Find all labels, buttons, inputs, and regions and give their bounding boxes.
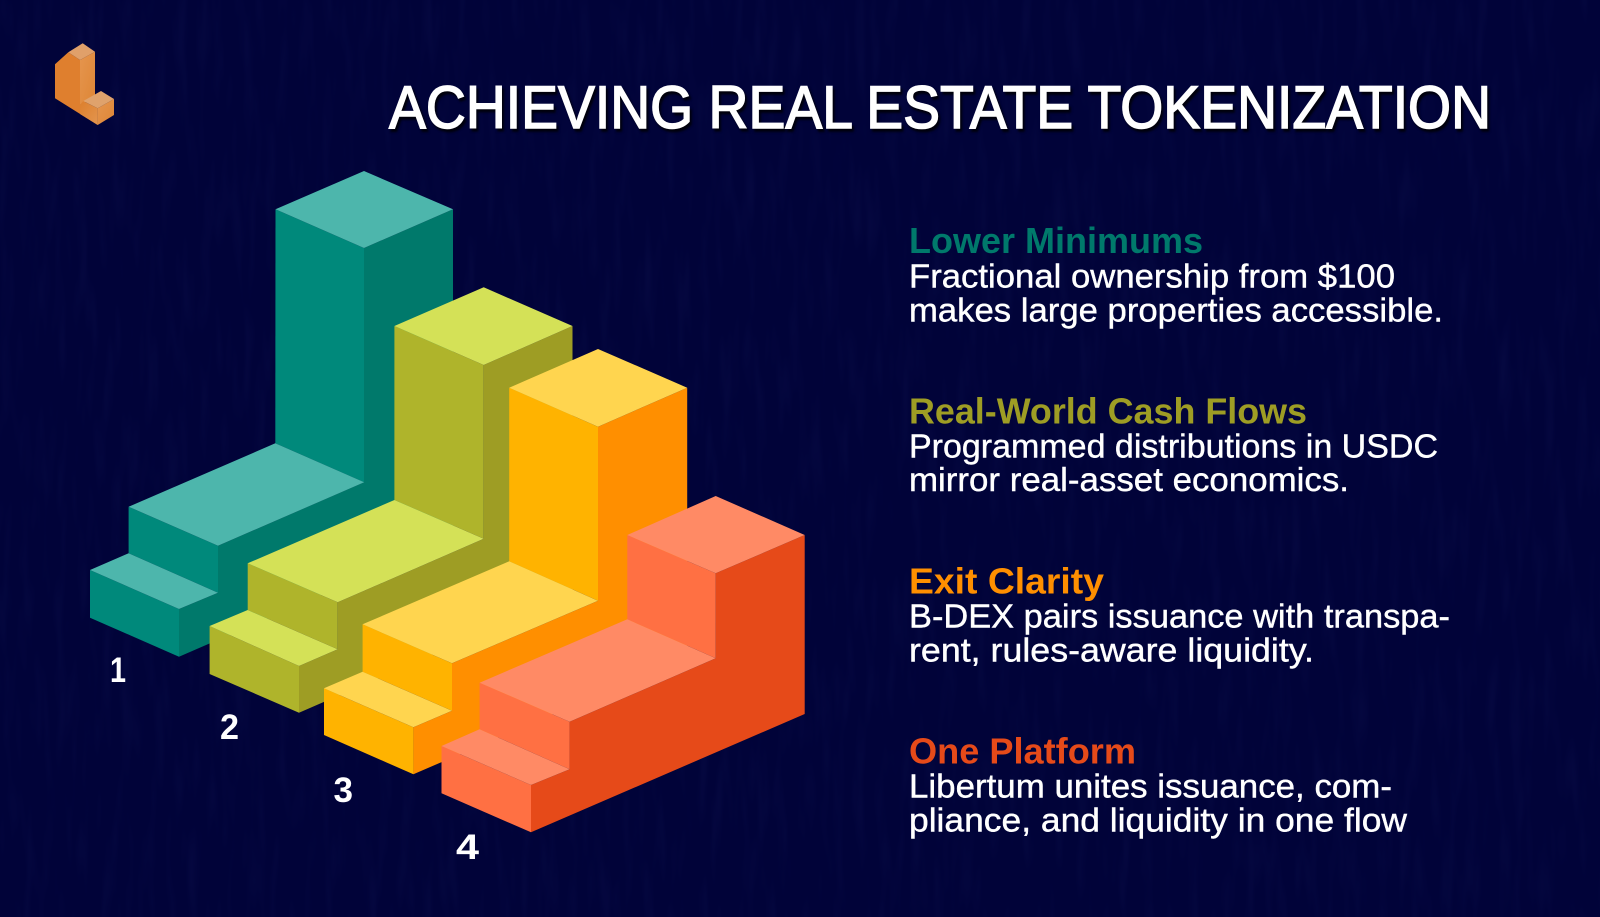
number 2: 2 (220, 708, 239, 747)
body: One Platform: Libertum unites issuance, com- (909, 768, 1392, 805)
number 4: 4 (456, 828, 480, 867)
heading: Real-World Cash Flows: Real-World Cash Flows (909, 391, 1307, 432)
body: Real-World Cash Flows: mirror real-asset economics. (909, 461, 1349, 498)
bar 3: amber (324, 349, 687, 774)
text block: One Platform (909, 731, 1407, 839)
bar 4: orange (442, 496, 805, 832)
heading: One Platform: One Platform (909, 731, 1136, 772)
body: Lower Minimums: makes large properties accessible. (909, 291, 1443, 328)
number 3: 3 (334, 771, 353, 810)
number 1: 1 (110, 651, 126, 690)
icon: Libertum logo (55, 43, 114, 125)
text block: Real-World Cash Flows (909, 391, 1438, 498)
text block: Lower Minimums (909, 220, 1443, 328)
body: Real-World Cash Flows: Programmed distributions in USDC (909, 427, 1438, 464)
heading: Exit Clarity: Exit Clarity (909, 560, 1104, 601)
heading: Lower Minimums: Lower Minimums (909, 220, 1203, 261)
text block: Exit Clarity (909, 560, 1450, 669)
body: Exit Clarity: B-DEX pairs issuance with transpa- (909, 598, 1450, 635)
body: Exit Clarity: rent, rules-aware liquidity. (909, 632, 1314, 669)
chart: isometric stepped bars (90, 171, 805, 867)
body: One Platform: pliance, and liquidity in one flow (909, 802, 1407, 839)
body: Lower Minimums: Fractional ownership from $100 (909, 258, 1395, 295)
bar 2: lime (210, 287, 572, 713)
bar 1: teal (90, 171, 453, 657)
title: ACHIEVING REAL ESTATE TOKENIZATION (389, 74, 1491, 141)
